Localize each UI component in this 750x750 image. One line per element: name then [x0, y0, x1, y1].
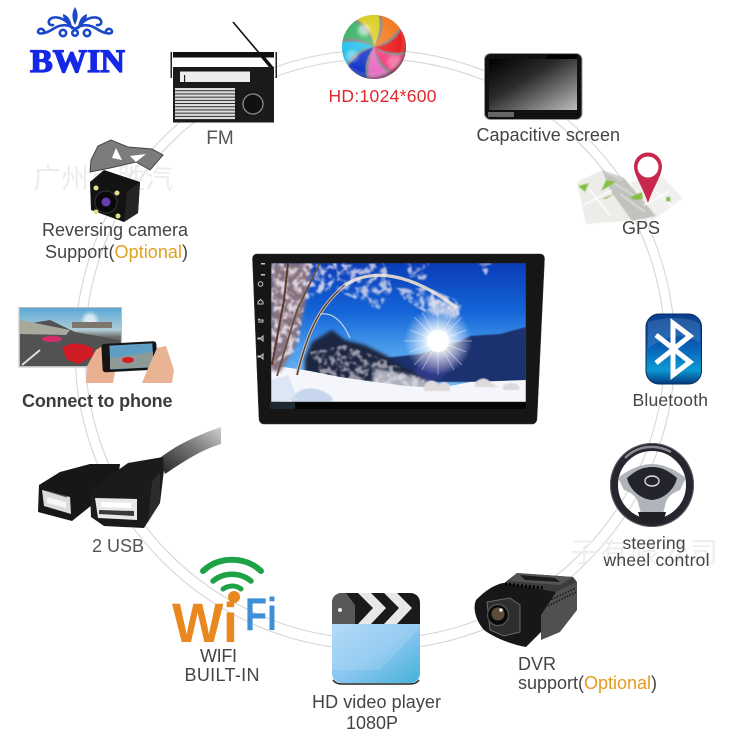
icon: reversing camera [90, 140, 163, 222]
label: steering wheel control: steering [622, 533, 686, 553]
label: connect to phone: Connect to phone [22, 391, 172, 411]
label: 2 USB: 2 USB [92, 536, 144, 556]
logo ornament [38, 7, 112, 36]
snow ground [271, 365, 526, 402]
logo wordmark: BWIN [30, 44, 125, 80]
item: HD resolution [330, 15, 436, 102]
label: DVR support optional: support(Optional) [518, 673, 657, 693]
right connector [90, 457, 164, 528]
sun [404, 307, 472, 375]
item: FM radio [170, 22, 277, 149]
label: capacitive screen: Capacitive screen [476, 125, 620, 145]
device bezel [252, 254, 544, 424]
label: steering wheel control: wheel control [602, 550, 710, 570]
watermark: right: 子有限公司 [570, 537, 720, 568]
left connector [38, 464, 120, 521]
item: WiFi [172, 560, 277, 685]
central head unit [252, 254, 544, 424]
device wallpaper: snowy winter scene [271, 263, 526, 402]
label: reversing camera support optional: Reversing camera [42, 220, 189, 240]
item: capacitive screen [476, 54, 620, 145]
icon: colour ball [342, 15, 406, 79]
label: Bluetooth: Bluetooth [632, 390, 708, 410]
label: WiFi built-in: BUILT-IN [184, 665, 260, 685]
icon: USB cable [38, 427, 221, 528]
icon: wifi logo [172, 560, 277, 654]
label: steering wheel control [602, 533, 710, 570]
icon: clapperboard [332, 593, 420, 684]
bent snow-covered birch [297, 275, 457, 375]
device side buttons [258, 263, 265, 359]
label: FM: FM [206, 128, 234, 149]
label: HD video player 1080P: 1080P [346, 713, 398, 733]
label: resolution: HD:1024*600 [328, 86, 437, 106]
item: reversing camera [42, 140, 189, 262]
item: USB [38, 427, 221, 556]
icon: steering wheel [610, 444, 694, 526]
icon: folded map [577, 170, 683, 224]
label: DVR support optional [518, 654, 657, 693]
label: HD video player 1080P [312, 692, 441, 733]
icon: screen [484, 54, 582, 120]
logo: BWIN [30, 7, 125, 80]
item: HD video player [312, 593, 441, 733]
icon: wifi logo: Wi [172, 591, 238, 654]
dark treeline [302, 328, 428, 387]
icon: radio [170, 22, 277, 122]
distant mountains [385, 327, 526, 382]
icon: bluetooth badge [646, 314, 702, 384]
label: WiFi built-in [184, 646, 260, 685]
snowy left trees [271, 263, 312, 372]
icon: location pin [634, 152, 662, 203]
icon: dash camera [475, 573, 577, 647]
icon: mirrored game screen and phone [18, 307, 174, 383]
item: Bluetooth [632, 314, 708, 410]
label: HD video player 1080P: HD video player [312, 692, 441, 712]
double ring connecting the features [75, 50, 675, 650]
watermark: left: 广州百胜汽 [33, 163, 173, 194]
icon: wifi logo: Fi [245, 588, 277, 640]
item: GPS [577, 152, 683, 238]
item: DVR [475, 573, 657, 693]
snow clusters on branches [335, 263, 492, 320]
label: WiFi built-in: WIFI [200, 646, 237, 666]
label: reversing camera support optional: Support(Optional) [45, 242, 188, 262]
item: connect to phone [18, 307, 174, 411]
label: reversing camera support optional [42, 220, 189, 262]
label: DVR support optional: DVR [518, 654, 556, 674]
item: steering wheel control [602, 444, 710, 570]
snow on treeline [310, 344, 425, 386]
label: GPS: GPS [622, 218, 660, 238]
